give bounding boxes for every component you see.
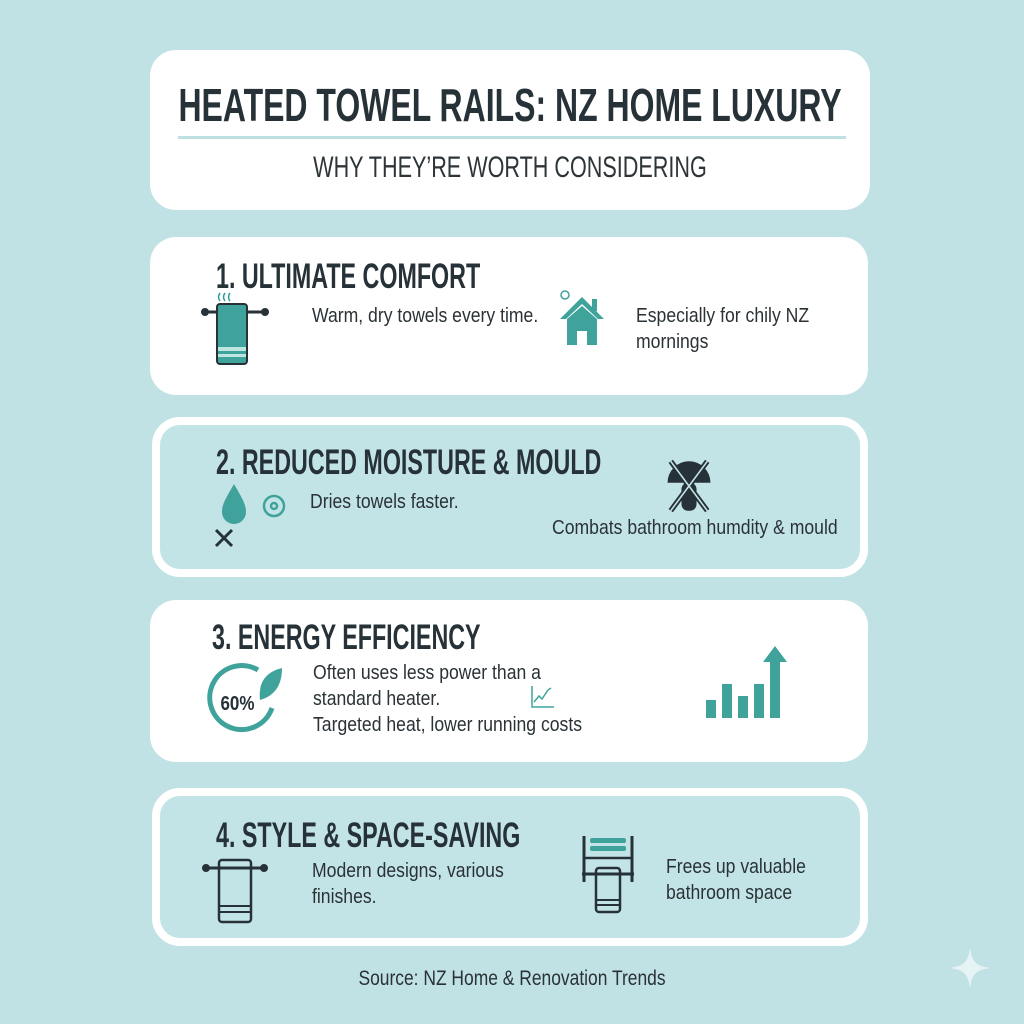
heading 4: 4. STYLE & SPACE-SAVING <box>216 816 520 855</box>
panel 4: style & space <box>152 788 868 946</box>
text: less power: Often uses less power than a <box>313 662 541 684</box>
text: modern designs <box>312 860 504 908</box>
text: frees space: Frees up valuable <box>666 856 806 878</box>
icon: heated towel <box>201 292 269 365</box>
text: chilly mornings <box>636 305 809 353</box>
title card <box>150 50 870 210</box>
text: frees space <box>666 856 806 904</box>
panel 3: energy efficiency <box>150 600 868 762</box>
text: less power <box>313 662 582 736</box>
text: dries faster: Dries towels faster. <box>310 491 459 513</box>
text: chilly mornings: Especially for chily NZ <box>636 305 809 327</box>
icon: mould crossed out <box>668 460 710 512</box>
icon: 60% ring with leaf <box>207 663 282 732</box>
source: Source: NZ Home & Renovation Trends <box>358 967 666 990</box>
text: frees space: bathroom space <box>666 882 792 904</box>
heading 1: 1. ULTIMATE COMFORT <box>216 257 480 296</box>
heading 2: 2. REDUCED MOISTURE & MOULD <box>216 443 601 482</box>
text: combats humidity: Combats bathroom humdity & mould <box>552 517 838 539</box>
icon: bar chart with arrow <box>706 646 787 718</box>
icon: water drop with x <box>215 484 286 547</box>
text: modern designs: finishes. <box>312 886 377 908</box>
text: less power: standard heater. <box>313 688 440 710</box>
panel 1: ultimate comfort <box>150 237 868 395</box>
icon: house <box>560 290 604 345</box>
subtitle: WHY THEY’RE WORTH CONSIDERING <box>313 151 707 184</box>
icon: small line chart <box>531 686 554 708</box>
panel 2: moisture & mould <box>152 417 868 577</box>
text: less power: Targeted heat, lower running costs <box>313 714 582 736</box>
icon: towel rail outline <box>202 858 268 924</box>
icon: wall rail <box>582 836 634 914</box>
text: chilly mornings: mornings <box>636 331 708 353</box>
icon: 60% ring with leaf: 60% <box>220 692 254 714</box>
text: modern designs: Modern designs, various <box>312 860 504 882</box>
icon: sparkle <box>950 948 990 988</box>
text: warm dry towels: Warm, dry towels every time. <box>312 305 538 327</box>
title: HEATED TOWEL RAILS: NZ HOME LUXURY <box>178 79 842 131</box>
heading 3: 3. ENERGY EFFICIENCY <box>212 618 481 657</box>
